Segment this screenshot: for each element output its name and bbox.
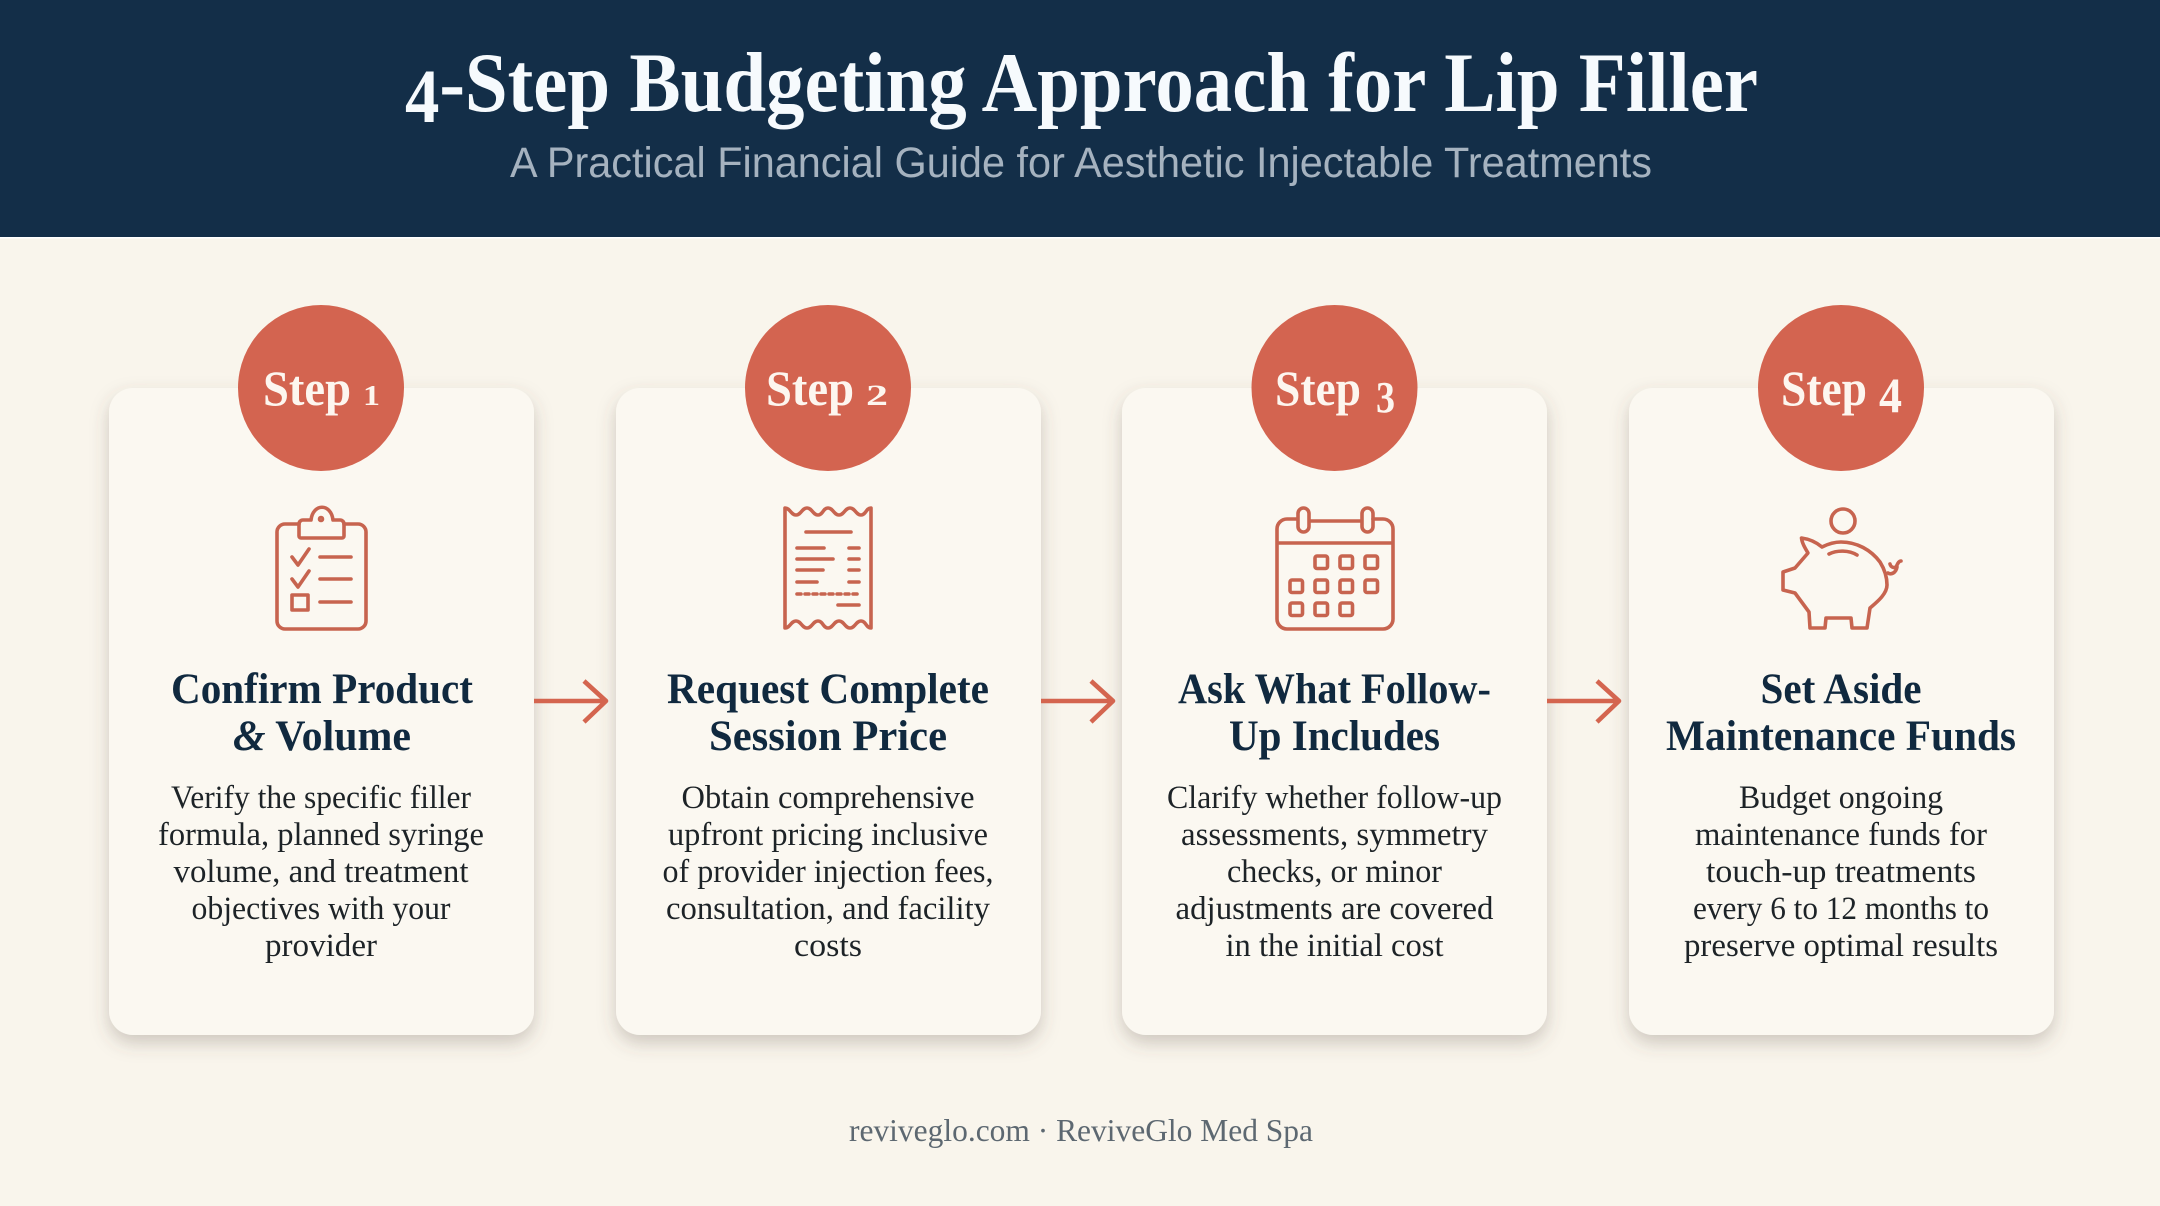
step 2 badge: Step <box>766 360 854 416</box>
step 1 badge <box>238 305 404 471</box>
heading: set aside maintenance funds: Set Aside <box>1760 666 1922 713</box>
step 1 badge: Step <box>263 360 351 416</box>
card 3 background <box>1122 388 1547 1035</box>
heading: request complete session price: Session Price <box>709 713 947 760</box>
body text step 2: upfront pricing inclusive <box>668 817 988 853</box>
body text step 3: checks, or minor <box>1227 854 1442 890</box>
body text step 1: Verify the specific filler <box>171 780 471 816</box>
body text step 3: adjustments are covered <box>1176 891 1494 927</box>
heading: confirm product and volume: Confirm Product <box>171 666 474 713</box>
icon: clipboard checklist <box>277 507 366 629</box>
panel: step 3 <box>1122 305 1547 1035</box>
body text step 1: formula, planned syringe <box>158 817 484 853</box>
body text step 4 <box>1684 780 1998 964</box>
arrow: step 1 to step 2 <box>534 681 606 722</box>
subtitle: A Practical Financial Guide for Aesthetic Injectable Treatments <box>510 139 1652 187</box>
card 2 background <box>616 388 1041 1035</box>
heading: confirm product and volume <box>171 666 474 760</box>
step 4 badge <box>1758 305 1924 471</box>
heading: set aside maintenance funds <box>1666 666 2016 760</box>
card 4 background <box>1629 388 2054 1035</box>
heading: request complete session price <box>667 666 989 760</box>
body text step 3 <box>1167 780 1502 964</box>
body text step 1: provider <box>265 928 377 964</box>
body text step 2: Obtain comprehensive <box>682 780 974 816</box>
heading: set aside maintenance funds: Maintenance Funds <box>1666 713 2016 760</box>
footer: reviveglo.com · ReviveGlo Med Spa <box>849 1112 1313 1148</box>
icon: piggy bank <box>1783 509 1901 628</box>
card 1 background <box>109 388 534 1035</box>
body text step 4: preserve optimal results <box>1684 928 1998 964</box>
body text step 4: every 6 to 12 months to <box>1693 891 1989 927</box>
panel: step 2 <box>616 305 1041 1035</box>
title: 4 <box>405 55 439 139</box>
step 3 badge <box>1252 305 1418 471</box>
heading: request complete session price: Request Complete <box>667 666 989 713</box>
panel: step 1 <box>109 305 534 1035</box>
heading: ask what follow-up includes: Ask What Follow- <box>1178 666 1491 713</box>
step 2 badge <box>745 305 911 471</box>
panel: step 4 <box>1629 305 2054 1035</box>
body text step 3: assessments, symmetry <box>1181 817 1488 853</box>
body text step 4: Budget ongoing <box>1739 780 1943 816</box>
step 4 badge: 4 <box>1879 367 1902 423</box>
step 3 badge: 3 <box>1376 373 1395 422</box>
body text step 2: consultation, and facility <box>666 891 990 927</box>
body text step 3: Clarify whether follow-up <box>1167 780 1502 816</box>
header banner <box>0 0 2160 238</box>
body text step 3: in the initial cost <box>1226 928 1444 964</box>
arrow: step 2 to step 3 <box>1041 681 1113 722</box>
heading: ask what follow-up includes: Up Includes <box>1229 713 1440 760</box>
body text step 4: maintenance funds for <box>1695 817 1987 853</box>
body text step 2: costs <box>794 928 862 964</box>
body text step 1: objectives with your <box>192 891 451 927</box>
icon: calendar <box>1277 508 1393 629</box>
step 3 badge: Step <box>1275 360 1361 416</box>
body text step 4: touch-up treatments <box>1706 854 1976 890</box>
heading: ask what follow-up includes <box>1178 666 1491 760</box>
body text step 1: volume, and treatment <box>174 854 468 890</box>
arrow: step 3 to step 4 <box>1547 681 1619 722</box>
body text step 2: of provider injection fees, <box>662 854 994 890</box>
body text step 1 <box>158 780 484 964</box>
body text step 2 <box>662 780 994 964</box>
heading: confirm product and volume: & Volume <box>233 713 411 760</box>
step 4 badge: Step <box>1781 360 1867 416</box>
step 2 badge: 2 <box>866 379 888 412</box>
icon: receipt <box>785 508 871 628</box>
step 1 badge: 1 <box>363 381 380 412</box>
title: -Step Budgeting Approach for Lip Filler <box>439 36 1758 130</box>
